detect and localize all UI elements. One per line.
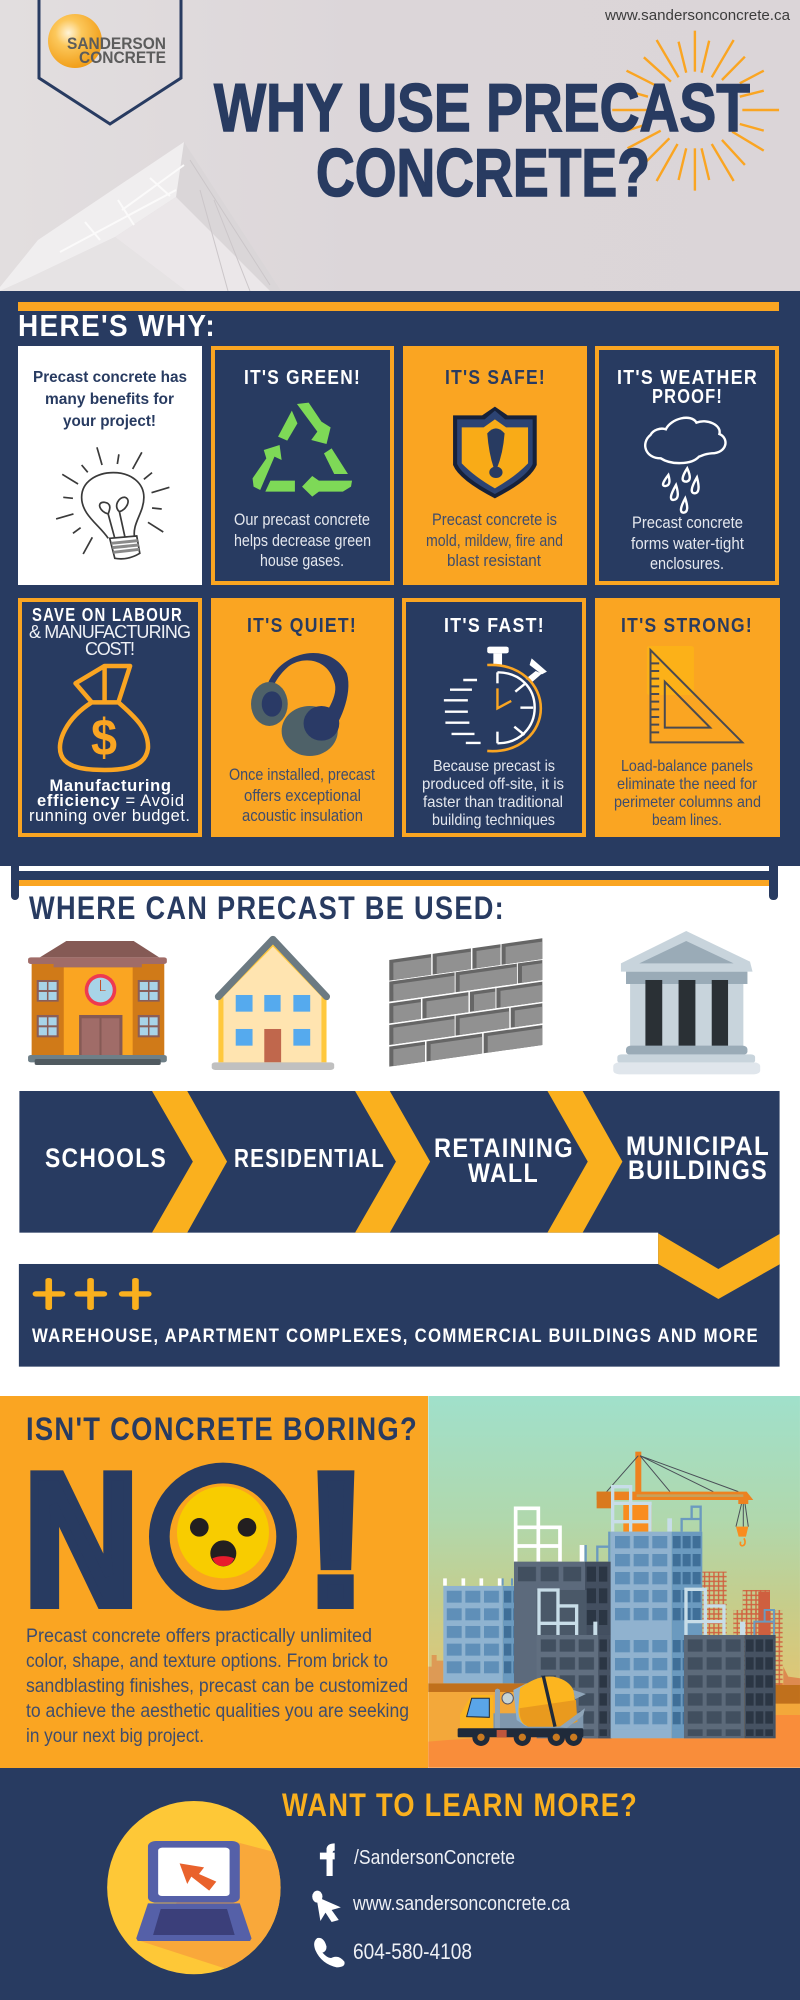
card: it's strong: beam lines. [652,812,722,829]
logo badge [39,0,181,124]
icon: cursor [312,1891,341,1922]
card: intro [18,346,202,585]
website url: www.sandersonconcrete.ca [604,7,791,24]
card: it's green: Our precast concrete [234,511,370,529]
icon: money bag [60,666,148,770]
right dark building [684,1589,776,1738]
icon: stopwatch [444,647,547,751]
card: it's fast: Because precast is [433,758,555,775]
building photo [0,142,281,291]
card: it's green [213,348,392,583]
card: intro: your project! [63,413,156,430]
icon: rain cloud [645,418,726,513]
body text: color, shape, and texture options. From brick to [26,1650,388,1672]
card: it's green: IT'S GREEN! [244,366,361,389]
card: it's quiet: Once installed, precast [229,766,375,784]
header band [0,0,800,291]
card: it's weather proof: enclosures. [650,555,724,573]
icon: set square [647,646,742,742]
card: it's quiet [211,598,394,837]
chevron process band: RETAINING [434,1133,574,1163]
card: it's safe: mold, mildew, fire and [426,532,563,550]
icon: laptop circle [107,1801,286,1974]
card: it's weather proof: PROOF! [652,385,723,408]
title [214,70,750,211]
chevron process band: BUILDINGS [628,1155,768,1185]
heading: want to learn more: WANT TO LEARN MORE? [282,1787,638,1823]
left blue building [443,1578,533,1683]
big no with emoji: N [24,1435,138,1644]
card: save on labour: & MANUFACTURING [29,622,191,642]
card: save on labour: efficiency = Avoid [37,792,184,810]
card: it's safe: blast resistant [447,552,541,570]
background scaffolds [702,1572,783,1685]
card: save on labour: running over budget. [29,807,190,825]
panel: here's why [0,291,800,866]
card: it's fast: IT'S FAST! [444,614,545,637]
card: it's strong [595,598,780,837]
icon: phone [314,1938,345,1967]
card: it's green: helps decrease green [234,532,371,550]
heading: here's why: HERE'S WHY: [18,308,216,343]
cement mixer truck [458,1676,586,1746]
chevron process band: MUNICIPAL [626,1131,770,1161]
card: it's strong: IT'S STRONG! [621,614,753,637]
logo badge: SANDERSON [67,34,166,53]
body text: Precast concrete offers practically unlimited [26,1625,372,1647]
card: it's fast: produced off-site, it is [422,776,564,793]
panel: where can precast be used [11,866,780,1367]
body text: sandblasting finishes, precast can be customized [26,1675,408,1697]
white scaffolds [516,1487,701,1562]
card: it's safe: IT'S SAFE! [445,366,546,389]
chevron process band [19,1091,780,1367]
card: it's fast [404,600,584,835]
title: CONCRETE? [316,135,650,211]
website: www.sandersonconcrete.ca [352,1893,571,1915]
crane [597,1452,753,1546]
icon: brick wall [389,938,542,1067]
dark building [514,1562,612,1738]
phone number: 604-580-4108 [353,1939,472,1964]
card: it's weather proof: Precast concrete [632,514,743,532]
chevron process band: WALL [468,1158,539,1188]
card: it's weather proof: IT'S WEATHER [617,366,758,389]
icon: recycling [253,403,352,497]
card: save on labour: Manufacturing [50,777,171,795]
facebook handle: /SandersonConcrete [354,1847,515,1869]
icon: facebook [320,1843,335,1876]
card: save on labour: SAVE ON LABOUR [32,605,183,625]
section bracket [11,866,778,900]
central tall building [611,1532,702,1738]
big no with emoji: ! [305,1435,367,1644]
body text: in your next big project. [26,1725,204,1747]
card: it's weather proof: forms water-tight [631,535,744,553]
card: it's quiet: IT'S QUIET! [247,614,357,637]
card: it's strong: Load-balance panels [621,758,753,775]
icon: school [28,941,167,1065]
card: save on labour [20,600,200,835]
card: it's weather proof [597,348,777,583]
card: intro: Precast concrete has [33,369,187,386]
heading: where can precast be used: WHERE CAN PRECAST BE USED: [29,890,505,926]
icon: shield [453,407,537,498]
icon: municipal building [613,931,760,1074]
chevron process band: SCHOOLS [45,1143,167,1173]
card: it's fast: faster than traditional [423,794,563,811]
card: it's safe [403,346,587,585]
icon: headphones [251,653,348,756]
card: it's strong: eliminate the need for [617,776,758,793]
card: it's quiet: offers exceptional [244,787,361,805]
ground [428,1655,800,1768]
icon: money bag: $ [91,709,117,767]
card: it's safe: Precast concrete is [432,511,557,529]
icon: house [212,939,334,1070]
illustration: construction site [428,1396,800,1768]
big no with emoji [24,1435,367,1644]
sunburst [612,31,779,191]
body text [26,1625,409,1747]
card: it's fast: building techniques [432,812,555,829]
card: it's strong: perimeter columns and [614,794,761,811]
chevron process band: RESIDENTIAL [234,1143,385,1173]
card: it's green: house gases. [260,552,344,570]
logo badge: CONCRETE [79,48,166,67]
panel: isn't concrete boring [0,1396,428,1768]
card: it's quiet: acoustic insulation [242,807,363,825]
heading: isn't concrete boring: ISN'T CONCRETE BORING? [26,1411,418,1447]
panel: want to learn more [0,1768,800,2000]
body text: to achieve the aesthetic qualities you are seeking [26,1700,409,1722]
card: save on labour: COST! [85,639,135,659]
card: intro: many benefits for [45,391,174,408]
icon: light bulb [56,447,169,559]
